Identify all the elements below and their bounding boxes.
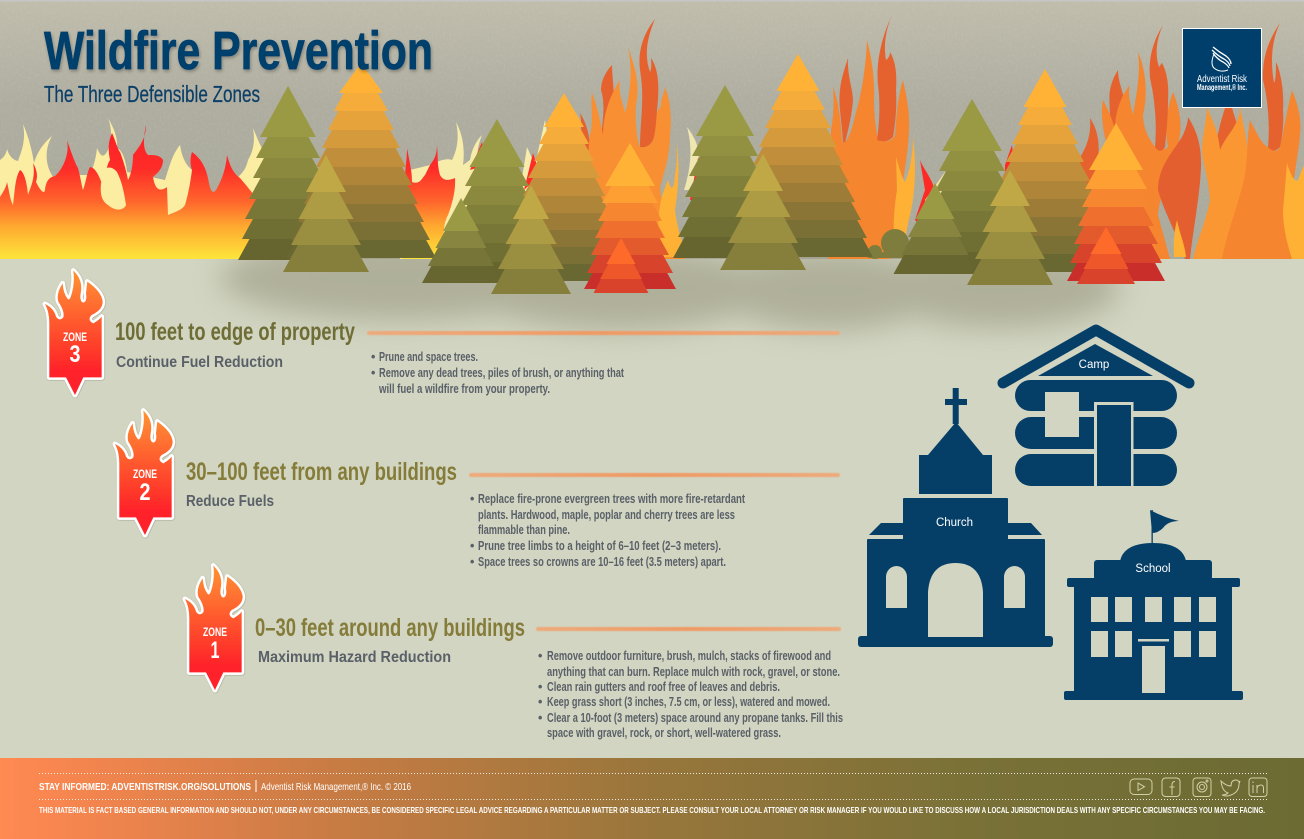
logo: [1182, 28, 1262, 108]
zone 3 badge: ZONE: [63, 332, 87, 344]
icon: twitter: [1221, 780, 1240, 796]
icon: school building: School: [1135, 563, 1171, 575]
icon: camp building: Camp: [1079, 359, 1109, 371]
tree: amber large 15: [970, 69, 1120, 272]
zone 1 badge: [185, 566, 243, 690]
zone 1 divider: [536, 627, 841, 631]
tree: gold small 12: [720, 154, 806, 270]
footer: [0, 758, 1304, 839]
tree: amber large 2: [286, 63, 436, 258]
zone 2 divider: [469, 473, 840, 477]
ground: [0, 259, 1304, 759]
tree: gold small 7: [491, 185, 571, 294]
footer: Adventist Risk Management,® Inc. © 2016: [261, 781, 411, 793]
zone 2 bullets: plants. Hardwood, maple, poplar and cherry trees are less: [478, 508, 735, 522]
zone 1 bullets: Clear a 10-foot (3 meters) space around any propane tanks. Fill this: [547, 711, 843, 725]
zone 1 bullets: •: [538, 649, 542, 663]
zone 1 badge: 1: [210, 637, 220, 664]
icon: linkedin: [1249, 778, 1267, 796]
zone 3 badge: [45, 271, 103, 395]
zone 3 bullets: •: [371, 350, 375, 364]
tree: small red 18: [1077, 227, 1135, 284]
footer contact line: STAY INFORMED: ADVENTISTRISK.ORG/SOLUTIONS: [39, 781, 251, 793]
flames: right group: [1075, 23, 1304, 259]
zone 2 badge: ZONE: [133, 469, 157, 481]
zone 1 heading: 0–30 feet around any buildings: [255, 614, 525, 642]
zone 2 badge: [115, 411, 173, 535]
zone 1 bullets: space with gravel, rock, or short, well-watered grass.: [547, 726, 781, 740]
flames: right-centre group: [828, 13, 1015, 259]
subtitle: The Three Defensible Zones: [44, 81, 260, 107]
zone 2 bullets: •: [470, 555, 474, 569]
zone 2 bullets: flammable than pine.: [478, 523, 570, 537]
bush: [868, 229, 909, 259]
tree: olive small 14: [894, 183, 976, 274]
zone 3 heading: 100 feet to edge of property: [115, 318, 355, 346]
tree: olive large 1: [238, 86, 338, 260]
zone 3 subheading: Continue Fuel Reduction: [116, 354, 283, 371]
zone 1 bullets: •: [538, 711, 542, 725]
zone 2 heading: 30–100 feet from any buildings: [186, 458, 457, 486]
icon: facebook: [1162, 778, 1180, 796]
tree: orange-red 17: [1067, 123, 1165, 281]
title: Wildfire Prevention: [44, 21, 433, 81]
zone 1 bullets: •: [538, 680, 542, 694]
tree: olive large 13: [920, 99, 1024, 272]
tree: olive large 5: [445, 119, 549, 281]
zone 2 bullets: [470, 492, 746, 569]
zone 2 badge: 2: [140, 479, 150, 506]
zone 3 divider: [367, 331, 840, 335]
zone 1 bullets: anything that can burn. Replace mulch with rock, gravel, or stone.: [547, 665, 840, 679]
zone 2 bullets: Prune tree limbs to a height of 6–10 feet (2–3 meters).: [478, 539, 721, 553]
flames: middle band: [400, 120, 552, 259]
zone 1 bullets: Clean rain gutters and roof free of leaves and debris.: [547, 680, 780, 694]
logo wordmark: Adventist Risk: [1197, 74, 1248, 85]
flames: tall centre group: [576, 19, 710, 259]
tree: amber large 6: [498, 93, 630, 281]
zone 2 bullets: Space trees so crowns are 10–16 feet (3.5 meters) apart.: [478, 555, 726, 569]
logo mark: [1212, 47, 1231, 71]
zone 2 bullets: •: [470, 492, 474, 506]
icon: church building: [858, 388, 1053, 647]
zone 3 bullets: Remove any dead trees, piles of brush, or anything that: [379, 366, 625, 380]
tree shadows on ground: [220, 236, 1120, 330]
icon: school building: [1064, 510, 1243, 700]
zone 1 bullets: Keep grass short (3 inches, 7.5 cm, or less), watered and mowed.: [547, 695, 830, 709]
zone 1 bullets: [538, 649, 843, 740]
social icons: [1130, 778, 1267, 796]
tree: amber large 11: [723, 54, 873, 257]
tree: gold small 16: [967, 170, 1053, 285]
sky background: [0, 0, 1304, 260]
icon: church building: Church: [936, 517, 973, 529]
zone 3 bullets: Prune and space trees.: [379, 350, 478, 364]
tree: olive large 10: [673, 85, 777, 258]
zone 3 badge: 3: [70, 341, 80, 368]
zone 3 bullets: will fuel a wildfire from your property.: [378, 382, 550, 396]
tree: olive small 4: [422, 198, 500, 283]
zone 1 badge: ZONE: [203, 627, 227, 639]
zone 1 bullets: Remove outdoor furniture, brush, mulch, stacks of firewood and: [547, 649, 831, 663]
zone 2 bullets: Replace fire-prone evergreen trees with more fire-retardant: [478, 492, 746, 506]
zone 3 bullets: •: [371, 366, 375, 380]
flames: left band: [0, 118, 280, 259]
zone 2 bullets: •: [470, 539, 474, 553]
logo: Management,® Inc.: [1197, 83, 1247, 92]
zone 1 subheading: Maximum Hazard Reduction: [258, 649, 451, 666]
icon: youtube: [1130, 779, 1152, 794]
icon: instagram: [1193, 778, 1211, 796]
tree: orange-red 8: [584, 143, 676, 289]
tree: small red 9: [594, 238, 648, 293]
icon: camp building: [1003, 330, 1189, 486]
zone 3 bullets: [371, 350, 625, 396]
zone 1 bullets: •: [538, 695, 542, 709]
tree: gold small 3: [283, 155, 369, 272]
zone 2 subheading: Reduce Fuels: [186, 493, 274, 510]
